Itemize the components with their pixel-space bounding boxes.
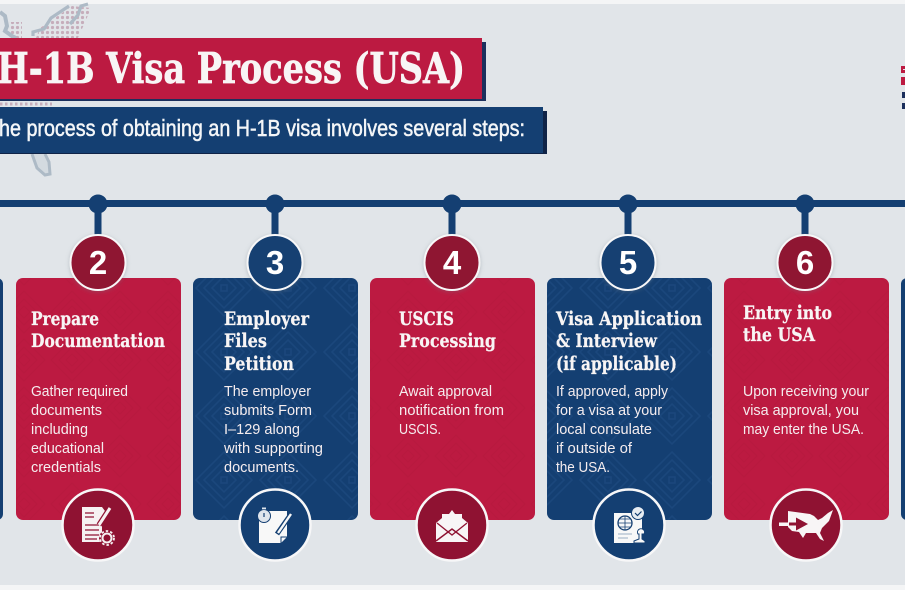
subtitle banner: The process of obtaining an H-1B visa involves several steps: (0, 115, 525, 141)
step 3: employer files petition: I–129 along (224, 421, 300, 438)
timeline (0, 194, 905, 236)
step 6: entry into the usa: Upon receiving your (743, 383, 869, 400)
step 3: employer files petition: Employer (224, 308, 310, 330)
step 3 number (248, 235, 302, 290)
logo fragment at right edge (901, 66, 905, 109)
step 4: uscis processing: Processing (399, 330, 496, 352)
step 5: visa application and interview: & Interview (556, 330, 658, 352)
step 5 number: 5 (619, 244, 637, 281)
icon: arrow entering USA map (770, 490, 842, 560)
step 3: employer files petition: The employer (224, 383, 311, 400)
step 3: employer files petition: with supporting (223, 440, 323, 457)
step 4 number (424, 235, 480, 290)
icon: open envelope (416, 490, 488, 560)
step 3: employer files petition: submits Form (224, 402, 312, 419)
step 2: prepare documentation (16, 235, 181, 560)
step 2: prepare documentation: educational (31, 440, 104, 457)
step 2 number (70, 235, 126, 290)
step 5: visa application and interview: for a visa at your (556, 402, 662, 419)
step 5: visa application and interview: if outside of (556, 440, 633, 457)
step 6: entry into the usa: visa approval, you (743, 402, 859, 419)
title banner (0, 38, 486, 101)
step 3: employer files petition (193, 235, 358, 560)
title banner: H-1B Visa Process (USA) (0, 44, 465, 93)
step 6: entry into the usa: the USA (743, 324, 815, 346)
card 7 fragment (901, 278, 905, 520)
step 4: uscis processing: notification from (399, 402, 504, 419)
step 4 number: 4 (443, 244, 462, 281)
step 5: visa application and interview: If approved, apply (556, 383, 668, 400)
step 3 number: 3 (266, 244, 284, 281)
card 1 fragment (0, 278, 3, 520)
step 6: entry into the usa: Entry into (743, 302, 832, 324)
step 2: prepare documentation: Gather required (31, 383, 128, 400)
icon: timed form with pen (240, 490, 310, 560)
step 3: employer files petition: Files (224, 330, 267, 352)
step 6: entry into the usa: may enter the USA. (743, 421, 864, 438)
step 4: uscis processing: Await approval (399, 383, 492, 400)
subtitle banner (0, 107, 547, 154)
step 4: uscis processing: USCIS. (399, 421, 441, 438)
step 2: prepare documentation: credentials (31, 459, 101, 476)
step 4: uscis processing: USCIS (399, 308, 454, 330)
icon: passport with globe, stamp and check (594, 490, 664, 560)
step 2: prepare documentation: documents (31, 402, 102, 419)
step 5: visa application and interview: (if applicable) (556, 353, 677, 375)
step 5: visa application and interview: the USA. (556, 459, 610, 476)
step 6: entry into the usa (724, 235, 889, 560)
step 4: uscis processing (370, 235, 535, 560)
step 2 number: 2 (89, 244, 107, 281)
step 3: employer files petition: documents. (224, 459, 299, 476)
step 2: prepare documentation: including (31, 421, 88, 438)
step 5 number (600, 235, 656, 290)
map of the USA east coast (0, 4, 91, 175)
step 5: visa application and interview: Visa Application (555, 308, 702, 330)
step 2: prepare documentation: Documentation (31, 330, 165, 352)
step 5: visa application and interview: local consulate (556, 421, 652, 438)
icon: document with pen and gear (62, 490, 134, 560)
step 5: visa application and interview (547, 235, 712, 560)
step 6 number (778, 235, 832, 290)
step 2: prepare documentation: Prepare (31, 308, 99, 330)
step 3: employer files petition: Petition (224, 353, 294, 375)
step 6 number: 6 (796, 244, 814, 281)
